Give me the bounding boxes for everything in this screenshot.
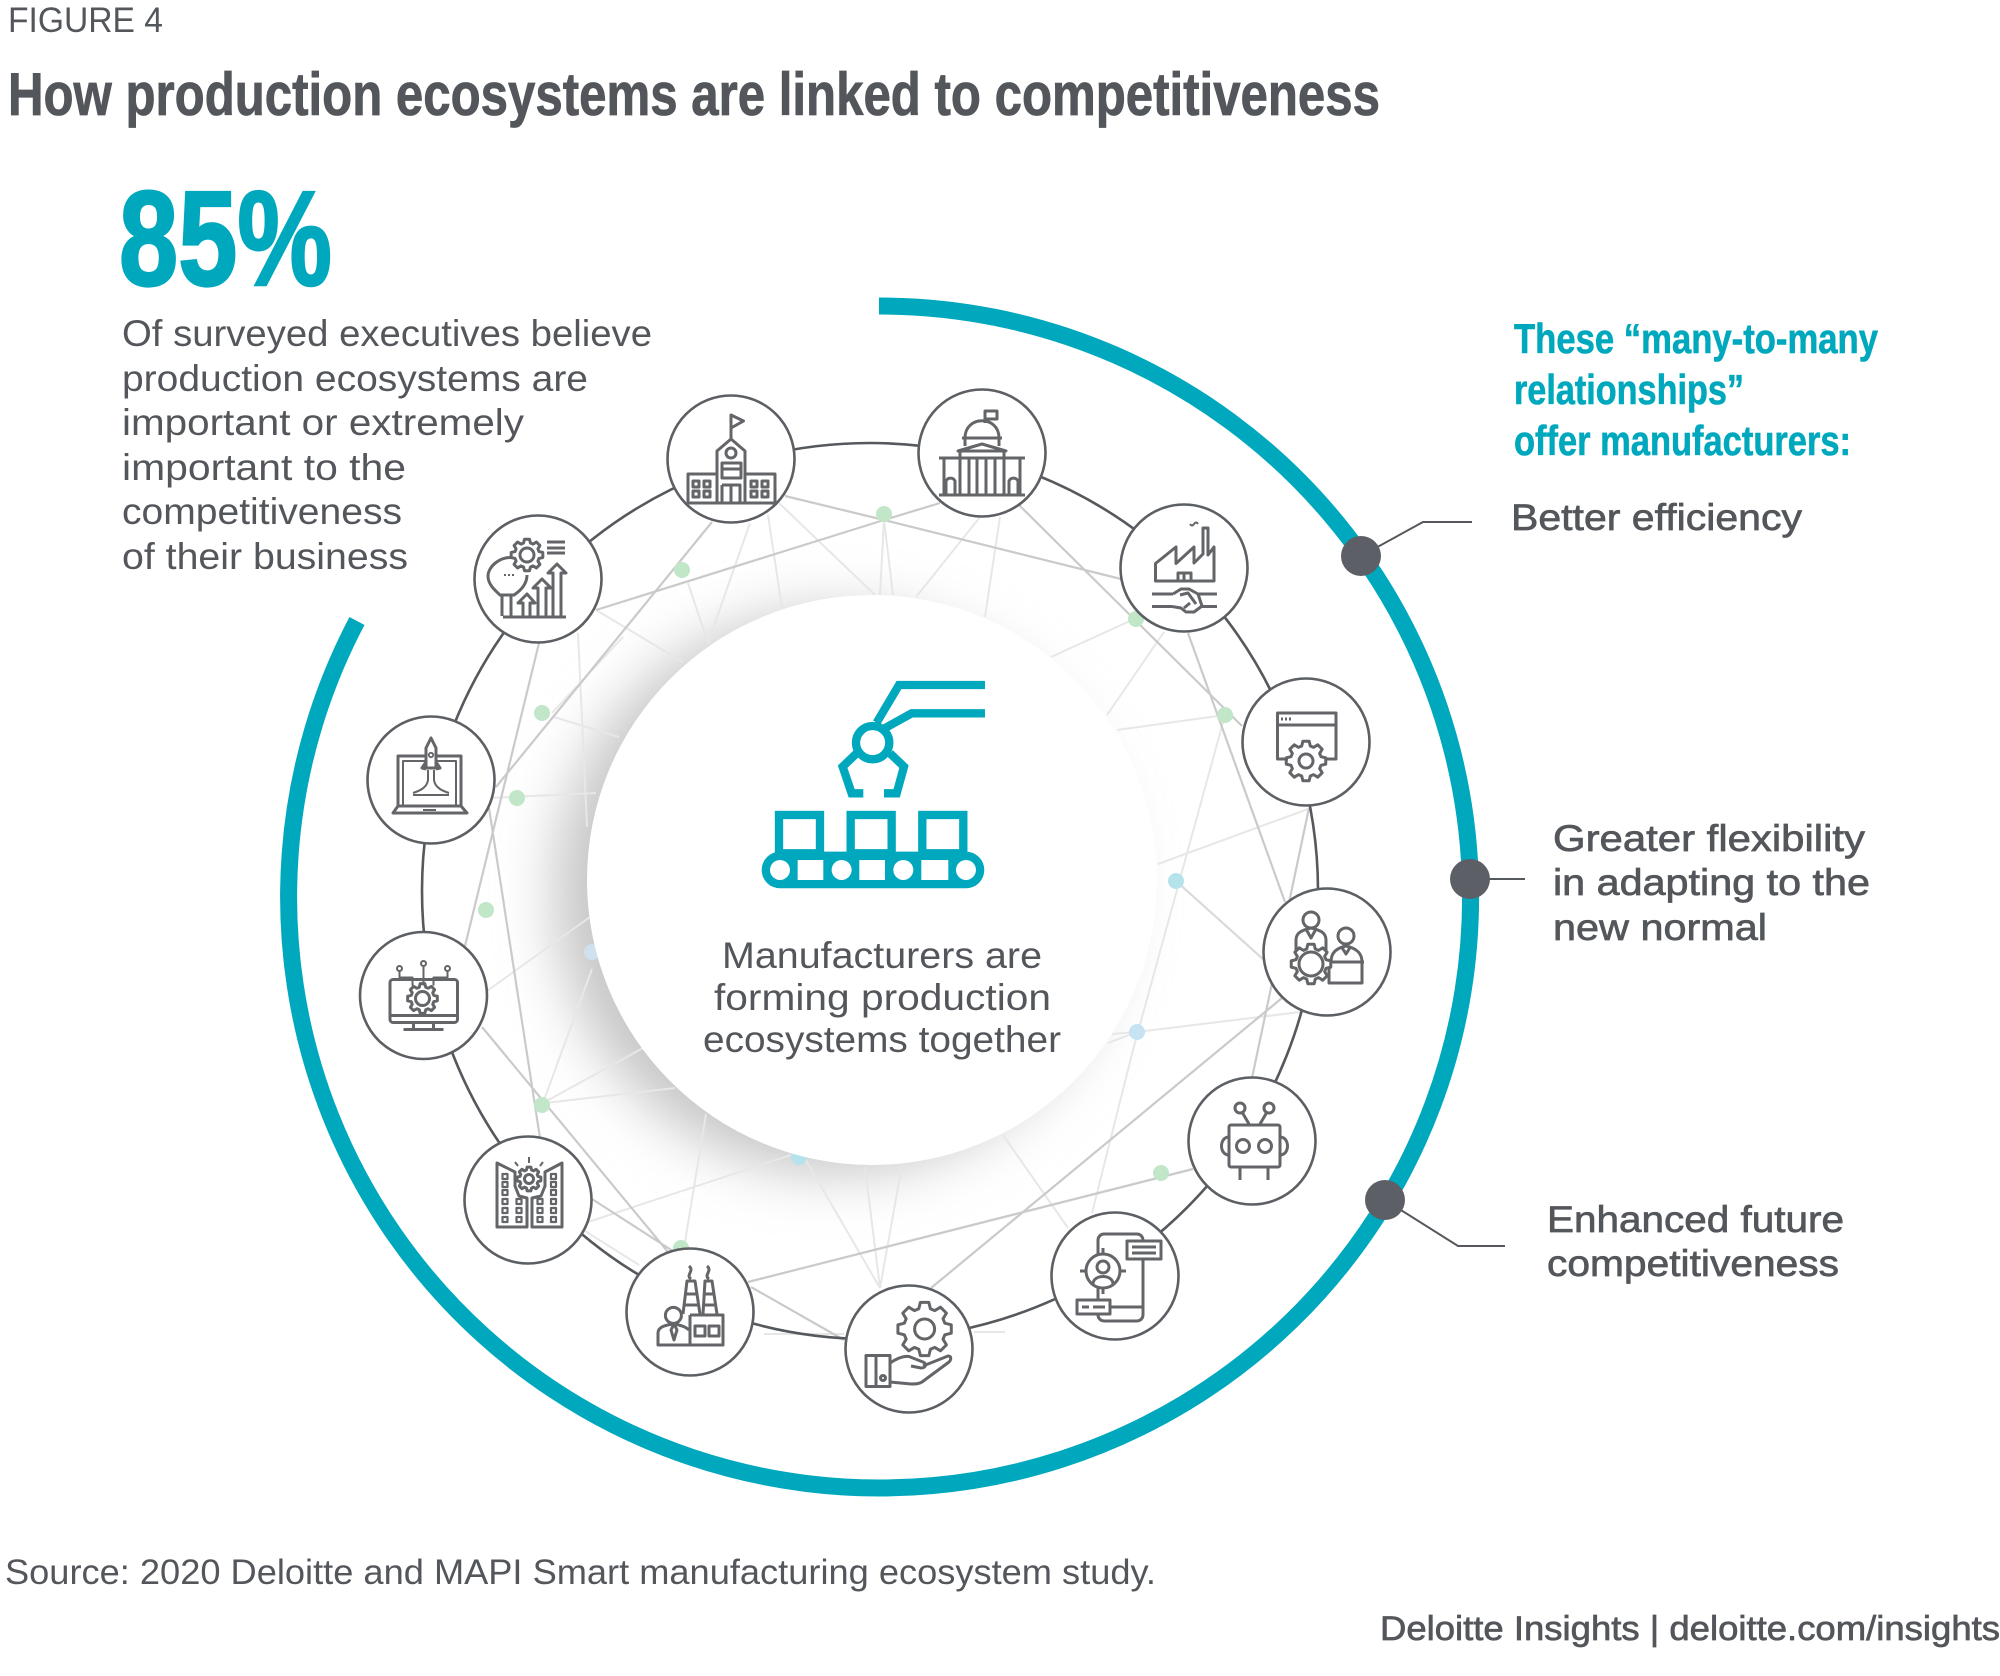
center white circle (587, 595, 1157, 1165)
teal heading: many-to-many relationships: relationships” (1514, 366, 1744, 413)
benefit: greater flexibility: in adapting to the (1553, 862, 1870, 903)
stat description: production ecosystems are (122, 358, 588, 399)
icon node: phone with target (1052, 1212, 1178, 1340)
icon node: factory with manager (626, 1248, 754, 1376)
figure label: FIGURE 4 (8, 1, 163, 40)
teal heading: many-to-many relationships (1514, 315, 1879, 464)
connector: better efficiency (1341, 522, 1472, 576)
icon node: factory and handshake (1120, 504, 1248, 632)
network nodes: green and blue dots (478, 506, 1233, 1256)
inner ring connecting icons (422, 443, 1318, 1339)
benefit: enhanced future competitiveness (1547, 1199, 1844, 1284)
network web of connecting lines (465, 496, 1309, 1340)
stat description: competitiveness (122, 491, 402, 532)
stat description: important or extremely (122, 402, 525, 443)
teal heading: many-to-many relationships: These “many-to-many (1514, 315, 1879, 362)
center caption: forming production (714, 977, 1051, 1018)
icon node: school (668, 396, 794, 522)
benefit: better efficiency: Better efficiency (1511, 497, 1803, 538)
stat description: important to the (122, 447, 406, 488)
icon node: people and gear (1264, 888, 1390, 1016)
center caption: ecosystems together (703, 1019, 1061, 1060)
icon node: bulb, gear and growth arrows (474, 516, 602, 642)
connector: enhanced future competitiveness (1365, 1180, 1505, 1246)
benefit: enhanced future competitiveness: Enhanced future (1547, 1199, 1844, 1240)
icon node: capitol building (918, 390, 1046, 516)
icon node: laptop with rocket (368, 716, 494, 844)
center caption: Manufacturers are (722, 935, 1042, 976)
central soft shadow (554, 610, 1118, 1174)
benefit: enhanced future competitiveness: competitiveness (1547, 1243, 1839, 1284)
icon: robot arm over conveyor (762, 685, 985, 888)
icon node: hand holding gear (846, 1286, 972, 1412)
stat description (122, 313, 652, 577)
source note: Source: 2020 Deloitte and MAPI Smart manufacturing ecosystem study. (5, 1553, 1156, 1592)
big stat: 85%: 85% (119, 163, 332, 314)
outer teal arc (289, 306, 1471, 1488)
credit line: Deloitte Insights | deloitte.com/insights (1380, 1610, 2000, 1648)
connector: greater flexibility (1450, 859, 1525, 899)
benefit: greater flexibility (1553, 818, 1870, 948)
title: How production ecosystems are linked to competitiveness (8, 61, 1380, 128)
icon node: monitor with gear (360, 932, 487, 1059)
center caption (703, 935, 1061, 1060)
icon node: browser with gear (1242, 678, 1370, 806)
stat description: of their business (122, 536, 408, 577)
icon node: robot (1188, 1078, 1316, 1204)
icon node: buildings and gear (464, 1136, 592, 1264)
benefit: greater flexibility: new normal (1553, 907, 1767, 948)
stat description: Of surveyed executives believe (122, 313, 652, 354)
teal heading: many-to-many relationships: offer manufacturers: (1514, 417, 1851, 464)
benefit: greater flexibility: Greater flexibility (1553, 818, 1866, 859)
